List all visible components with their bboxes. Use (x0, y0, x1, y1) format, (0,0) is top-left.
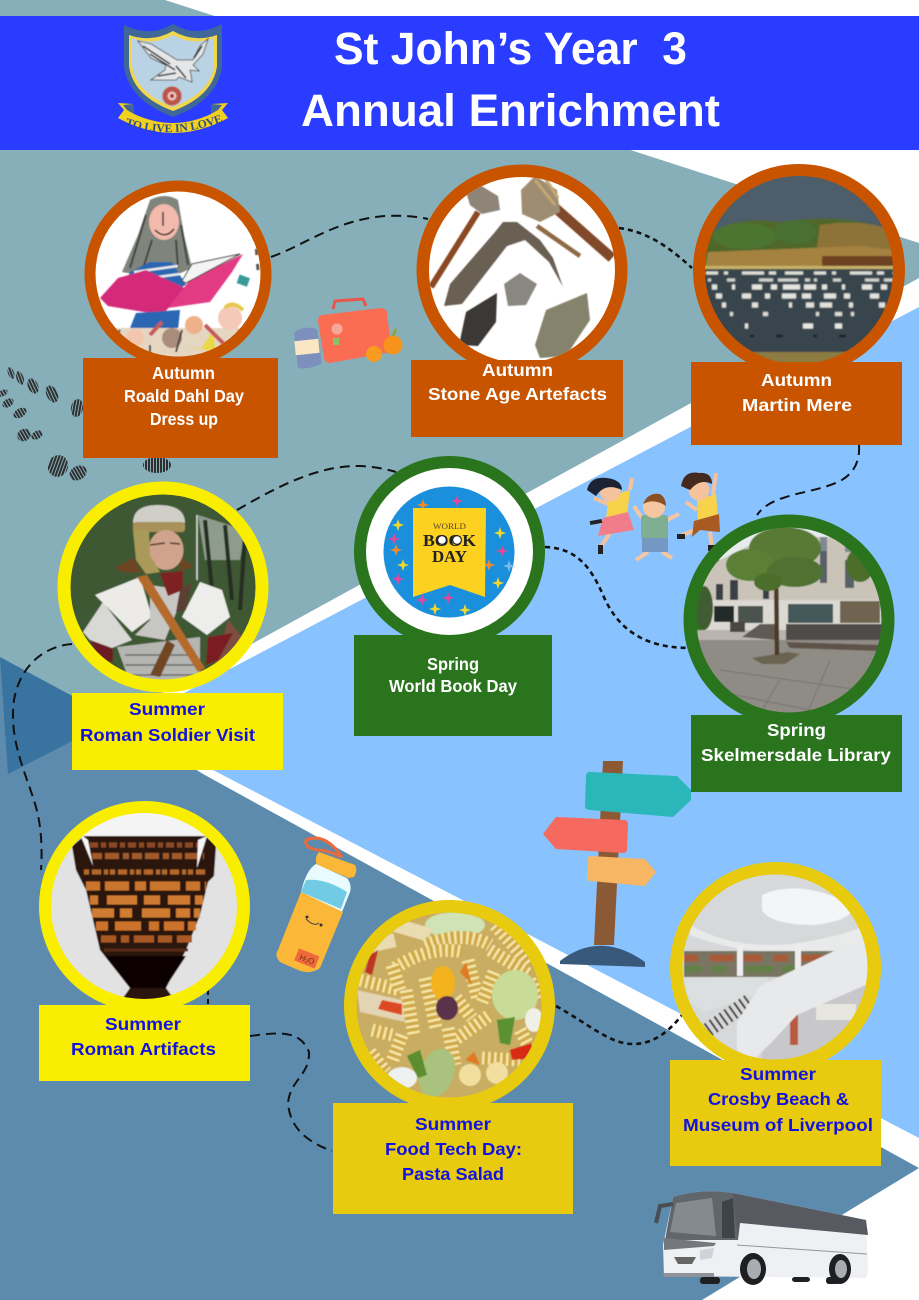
label box: Crosby Beach & (708, 1089, 849, 1109)
icon: lunchbox (294, 299, 402, 368)
image: lake with swans (693, 164, 905, 376)
label box (83, 358, 278, 458)
label box: Roman Artifacts (71, 1039, 216, 1059)
icon: jumping children (587, 473, 720, 560)
label box (670, 1060, 881, 1166)
icon: school crest (118, 24, 228, 133)
image: stone tools (416, 164, 628, 376)
title (301, 23, 720, 136)
label box (354, 635, 552, 736)
title: Annual Enrichment (301, 85, 720, 136)
panel: Roman Soldier Visit (58, 482, 283, 770)
label box: Spring (767, 720, 826, 740)
image: Roman soldier (58, 482, 268, 692)
icon: water bottle: H₂O (298, 953, 316, 966)
image: World Book Day badge (354, 456, 545, 647)
title: St John’s Year 3 (334, 23, 687, 74)
label box: Pasta Salad (402, 1164, 504, 1184)
header banner (0, 16, 919, 150)
footprints decoration (0, 366, 171, 484)
icon: water bottle (276, 838, 356, 972)
label box (691, 362, 902, 445)
icon: coach bus (656, 1191, 868, 1285)
label box: Skelmersdale Library (701, 745, 891, 765)
label box: Food Tech Day: (385, 1139, 522, 1159)
label box: Museum of Liverpool (683, 1115, 873, 1135)
label box: World Book Day (389, 676, 517, 696)
label box (333, 1103, 573, 1214)
label box (691, 715, 902, 792)
label box: Autumn (761, 370, 832, 390)
icon: school crest: TO LIVE IN LOVE (126, 114, 222, 132)
panel: Martin Mere (691, 164, 905, 445)
label box: Summer (740, 1064, 816, 1084)
label box: Autumn (152, 363, 215, 383)
label box: Autumn (482, 360, 553, 380)
image: Matilda illustration (84, 180, 272, 368)
label box: Summer (415, 1114, 491, 1134)
panel: Skelmersdale Library (684, 514, 902, 792)
panel: Roald Dahl Day (83, 180, 278, 458)
image: Greek vase (39, 801, 250, 1012)
image: World Book Day badge: DAY (432, 547, 467, 566)
image: World Book Day badge: WORLD (433, 521, 466, 531)
panel: Food Tech Day (333, 900, 573, 1214)
panel: Crosby Beach and Museum of Liverpool (670, 862, 881, 1166)
label box (411, 360, 623, 437)
panel: World Book Day (354, 456, 552, 736)
label box: Martin Mere (742, 395, 852, 415)
label box (39, 1005, 250, 1081)
image: library building (684, 514, 894, 732)
image: World Book Day badge: BOOK (423, 531, 477, 550)
image: pasta salad (344, 900, 555, 1111)
panel: Stone Age Artefacts (411, 164, 628, 437)
label box: Stone Age Artefacts (428, 384, 607, 404)
label box: Summer (105, 1014, 181, 1034)
label box: Roman Soldier Visit (80, 725, 255, 745)
label box: Spring (427, 654, 479, 674)
label box: Summer (129, 699, 205, 719)
label box (72, 693, 283, 770)
label box: Dress up (150, 409, 218, 429)
dashed route lines (13, 216, 859, 1151)
panel: Roman Artifacts (39, 801, 250, 1081)
image: museum interior (670, 862, 881, 1073)
label box: Roald Dahl Day (124, 386, 244, 406)
icon: signpost (543, 761, 691, 967)
